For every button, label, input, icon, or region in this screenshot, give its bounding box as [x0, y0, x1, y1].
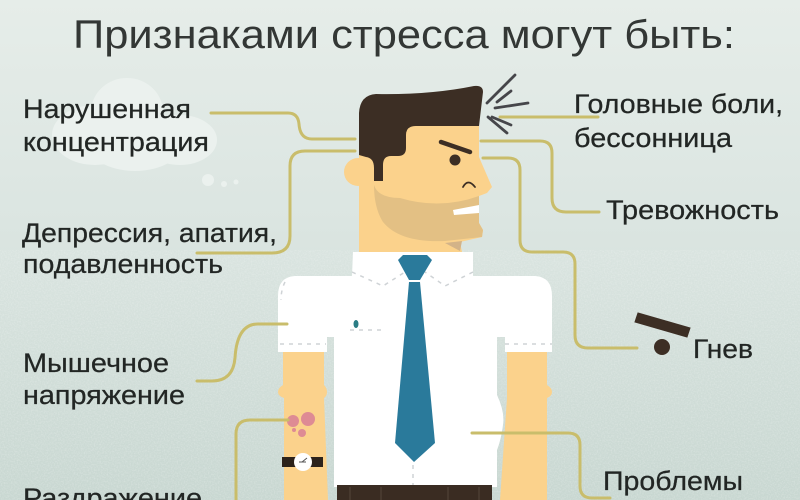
arms — [278, 350, 552, 500]
label: depression: подавленность — [23, 249, 223, 279]
trousers — [337, 485, 492, 500]
shirt — [278, 252, 552, 487]
beard — [374, 185, 483, 241]
stress lines at head — [487, 75, 528, 133]
label: anxiety: Тревожность — [606, 195, 779, 225]
label: muscle tension: напряжение — [23, 380, 185, 410]
neck and face — [359, 120, 492, 252]
rash — [287, 412, 315, 437]
label: muscle tension: Мышечное — [23, 348, 169, 378]
label: depression: Депрессия, апатия, — [22, 218, 277, 248]
label: concentration: концентрация — [23, 127, 209, 157]
hair — [359, 86, 483, 181]
ear — [344, 158, 372, 186]
neck shadow — [445, 241, 462, 251]
mouth — [453, 205, 479, 215]
title: Признаками стресса могут быть: — [73, 13, 735, 57]
pen in pocket — [354, 320, 358, 328]
tie — [395, 255, 435, 462]
label: headaches: Головные боли, — [574, 89, 783, 119]
label: anger: Гнев — [693, 334, 753, 364]
label: problems: Проблемы — [603, 466, 743, 496]
background grain — [0, 250, 800, 500]
connector lines — [197, 113, 637, 500]
label: headaches: бессонница — [574, 123, 733, 153]
nose wrinkle — [463, 182, 475, 187]
thought cloud — [52, 78, 238, 187]
anger icon — [635, 313, 690, 355]
man figure — [278, 86, 552, 500]
watch — [282, 453, 323, 471]
eyebrow — [441, 142, 470, 152]
eye — [450, 154, 460, 166]
label: concentration: Нарушенная — [23, 94, 191, 124]
